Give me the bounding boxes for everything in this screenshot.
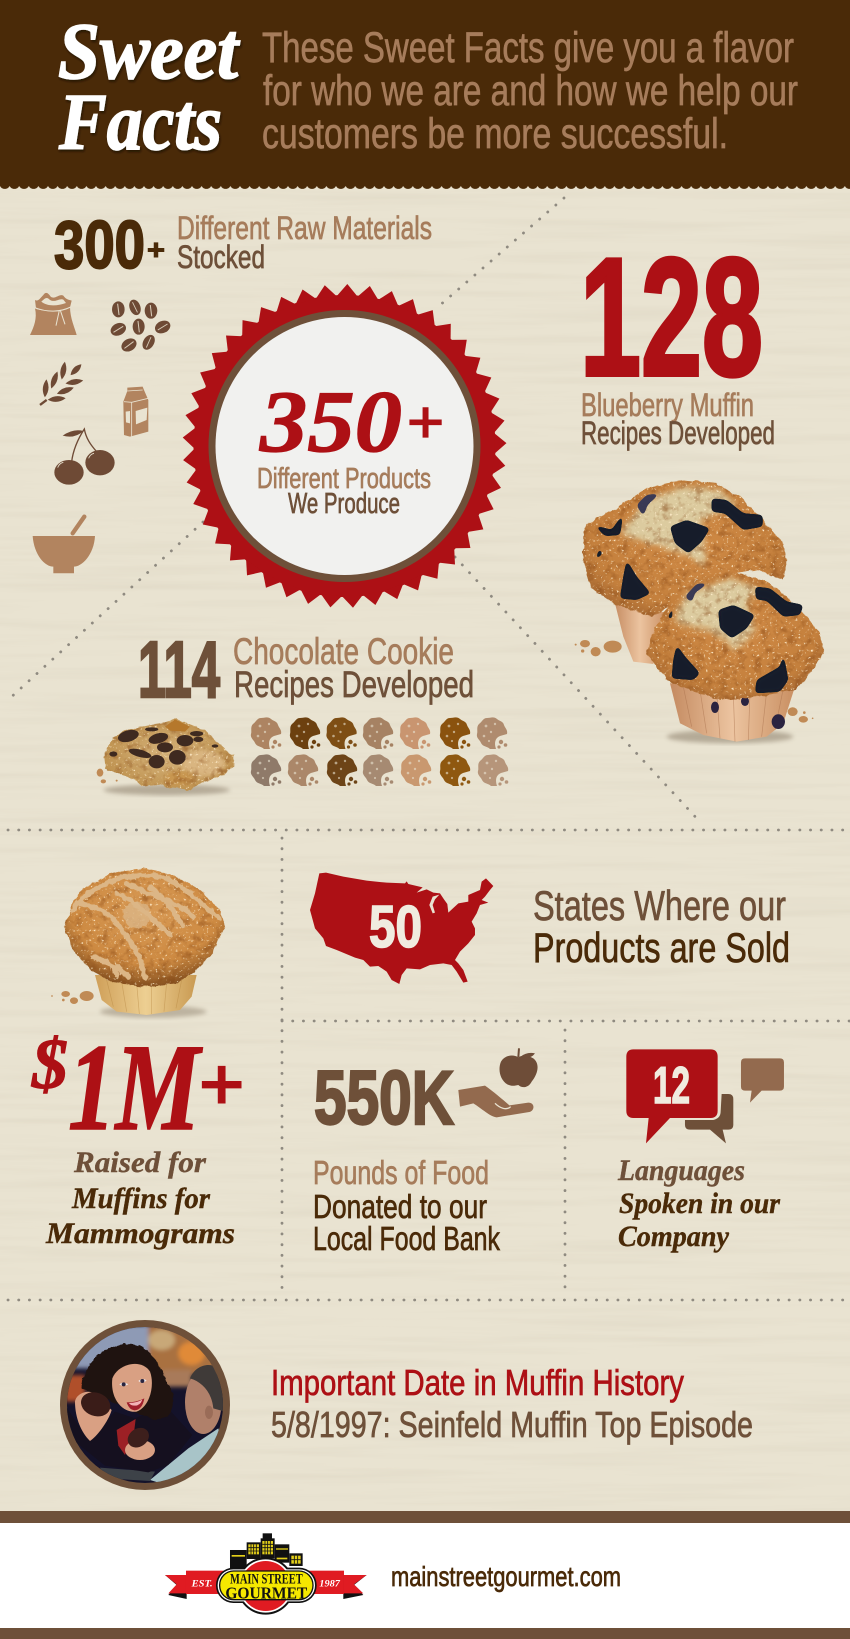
footer bbox=[0, 1511, 850, 1639]
stat: 114 chocolate cookie recipes bbox=[138, 625, 474, 714]
stat: 300+ raw materials: + bbox=[147, 234, 165, 265]
script caption: Mammograms bbox=[45, 1217, 235, 1250]
icon: mortar bowl bbox=[33, 517, 95, 573]
script caption bbox=[45, 1146, 235, 1250]
logo: Main Street Gourmet: EST. bbox=[191, 1579, 213, 1589]
caption: Local Food Bank bbox=[313, 1220, 500, 1257]
header intro text bbox=[262, 24, 798, 158]
table bbox=[100, 1468, 155, 1481]
number 350+: + bbox=[406, 389, 444, 457]
stat: 128 blueberry muffin recipes bbox=[580, 223, 775, 451]
number 50: 50 bbox=[369, 894, 422, 960]
script caption: Raised for bbox=[73, 1146, 206, 1179]
badge caption bbox=[257, 463, 431, 520]
stat: 114 chocolate cookie recipes: Recipes Developed bbox=[234, 664, 474, 705]
photo: streusel muffin bbox=[51, 868, 225, 1018]
caption: Donated to our bbox=[313, 1188, 487, 1225]
number 12: 12 bbox=[653, 1057, 690, 1115]
skyline bbox=[230, 1533, 303, 1568]
script caption: Languages bbox=[617, 1154, 745, 1187]
number 350+: 350 bbox=[259, 374, 402, 471]
badge caption: We Produce bbox=[288, 488, 400, 520]
icons: rows of cookies bbox=[251, 717, 508, 786]
header banner bbox=[0, 0, 850, 192]
title: Sweet Facts: Sweet bbox=[58, 8, 241, 96]
crumbs bbox=[575, 640, 813, 723]
script caption: Company bbox=[618, 1220, 730, 1253]
stat: 114 chocolate cookie recipes: Chocolate Cookie bbox=[233, 631, 454, 672]
logo: Main Street Gourmet bbox=[165, 1533, 367, 1615]
badge caption: Different Products bbox=[257, 463, 431, 495]
header intro text: customers be more successful. bbox=[262, 110, 728, 158]
stat: 550K pounds donated bbox=[313, 1048, 538, 1257]
badge: 350+ products bbox=[154, 258, 524, 634]
script caption: Muffins for bbox=[71, 1182, 210, 1215]
front muffin bbox=[647, 572, 823, 742]
brown ring and white disc bbox=[208, 310, 480, 582]
man's head bbox=[185, 1378, 221, 1434]
woman's hair bbox=[81, 1344, 173, 1420]
photo: blueberry muffins bbox=[575, 480, 823, 743]
caption bbox=[533, 882, 790, 971]
logo: Main Street Gourmet: GOURMET bbox=[225, 1584, 308, 1603]
text: important date: Important Date in Muffin History bbox=[271, 1362, 684, 1403]
stat: 300+ raw materials: Stocked bbox=[177, 239, 265, 275]
icon: wheat bbox=[40, 361, 84, 405]
dotted divider lines bbox=[8, 198, 850, 1300]
icon: cherries bbox=[54, 429, 115, 485]
stat: $1M+ raised: 1M bbox=[68, 1019, 203, 1156]
script caption bbox=[617, 1154, 780, 1253]
icon: speech bubbles bbox=[626, 1049, 784, 1143]
woman's body bbox=[65, 1405, 192, 1472]
oval badge bbox=[237, 1557, 294, 1615]
left hand and muffin bbox=[75, 1392, 112, 1441]
script caption: Spoken in our bbox=[619, 1187, 780, 1220]
icon: US map bbox=[310, 873, 493, 984]
title: Sweet Facts bbox=[58, 8, 241, 167]
stat: 12 languages bbox=[617, 1049, 784, 1253]
title: Sweet Facts: Facts bbox=[58, 79, 222, 167]
logo: Main Street Gourmet: 1987 bbox=[319, 1580, 340, 1590]
stat: 114 chocolate cookie recipes: 114 bbox=[138, 625, 220, 714]
stat: 50 states map bbox=[310, 873, 790, 984]
woman's face bbox=[112, 1364, 152, 1412]
shadow bbox=[667, 730, 793, 743]
stat: 550K pounds donated: 550K bbox=[314, 1056, 454, 1141]
red blouse bbox=[117, 1419, 136, 1455]
icon: milk carton bbox=[123, 387, 148, 437]
icon: coffee beans bbox=[109, 298, 172, 354]
stat: 300+ raw materials: Different Raw Materials bbox=[177, 210, 432, 246]
caption bbox=[313, 1154, 500, 1257]
stat: 300+ raw materials: 300 bbox=[54, 207, 145, 283]
logo: Main Street Gourmet: MAIN STREET bbox=[230, 1572, 303, 1588]
man's shoulder bbox=[150, 1428, 219, 1482]
stat: $1M+ raised: + bbox=[198, 1043, 244, 1127]
website url: mainstreetgourmet.com bbox=[391, 1561, 621, 1592]
photo: chocolate chip cookie bbox=[97, 718, 233, 795]
stat: $1M+ raised: $ bbox=[31, 1024, 68, 1104]
back muffin bbox=[583, 480, 787, 664]
ribbon bbox=[165, 1575, 367, 1599]
icon: flour bag bbox=[30, 293, 77, 335]
right hand and muffin bbox=[125, 1440, 155, 1460]
stat: $1M+ raised bbox=[31, 1019, 244, 1250]
red starburst bbox=[154, 258, 524, 634]
caption: Pounds of Food bbox=[313, 1154, 489, 1191]
photo: Seinfeld scene in round frame bbox=[60, 1320, 230, 1492]
stat: 300+ raw materials bbox=[54, 207, 432, 283]
stat: 128 blueberry muffin recipes: Blueberry Muffin bbox=[581, 387, 754, 423]
text: important date bbox=[271, 1362, 753, 1445]
icon: hand holding apple bbox=[458, 1048, 538, 1117]
